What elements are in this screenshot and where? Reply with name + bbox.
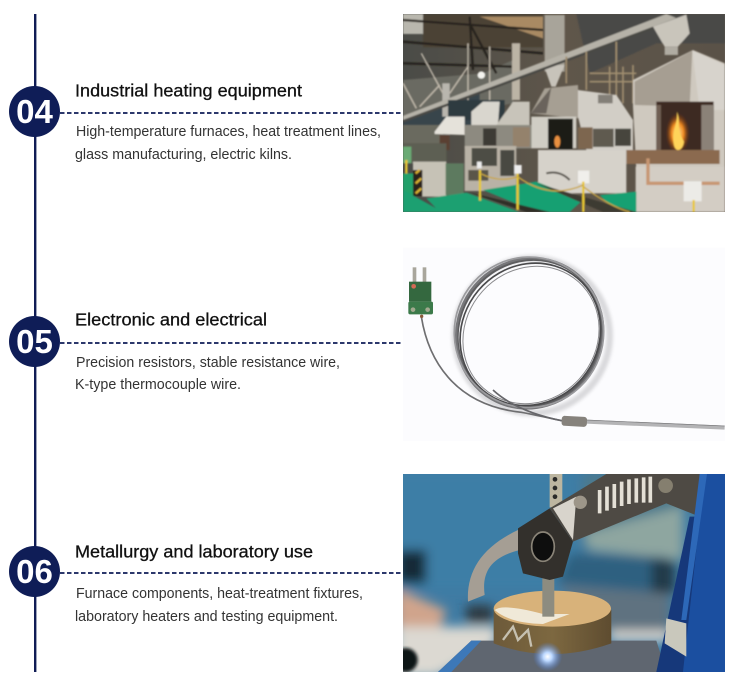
dashed connector 06	[60, 572, 402, 574]
blue stand	[656, 517, 701, 672]
description 05: Precision resistors, stable resistance wire,	[76, 355, 340, 371]
section 06: metallurgy and laboratory use	[9, 470, 725, 677]
description 04: glass manufacturing, electric kilns.	[75, 147, 292, 163]
photo: industrial furnaces	[403, 14, 725, 212]
number badge 05: 05	[16, 323, 53, 360]
metal disc	[494, 610, 611, 654]
metal plate	[438, 641, 666, 672]
description 04	[75, 124, 381, 163]
section 04: industrial heating equipment	[9, 14, 725, 212]
description 05: K-type thermocouple wire.	[75, 377, 241, 393]
number badge 06: 06	[16, 553, 53, 590]
timeline vertical line	[34, 14, 36, 672]
description 06: Furnace components, heat-treatment fixtures,	[76, 586, 363, 602]
spark	[533, 642, 562, 671]
description 04: High-temperature furnaces, heat treatment lines,	[76, 124, 381, 140]
photo: thermocouple wire	[403, 231, 725, 441]
number badge 04	[9, 86, 60, 137]
photo: metal sample test	[390, 470, 725, 677]
number badge 05	[9, 316, 60, 367]
description 06	[75, 586, 363, 625]
heading 06: Metallurgy and laboratory use	[75, 542, 313, 562]
electrode holder	[542, 577, 554, 617]
heading 04: Industrial heating equipment	[75, 80, 302, 100]
section 05: electronic and electrical	[9, 231, 725, 441]
description 05	[75, 355, 340, 393]
dashed connector 04	[60, 112, 402, 114]
number badge 06	[9, 546, 60, 597]
dashed connector 05	[60, 342, 402, 344]
number badge 04: 04	[16, 93, 53, 130]
description 06: laboratory heaters and testing equipment.	[75, 609, 338, 625]
connector	[408, 267, 433, 318]
heading 05: Electronic and electrical	[75, 310, 267, 330]
